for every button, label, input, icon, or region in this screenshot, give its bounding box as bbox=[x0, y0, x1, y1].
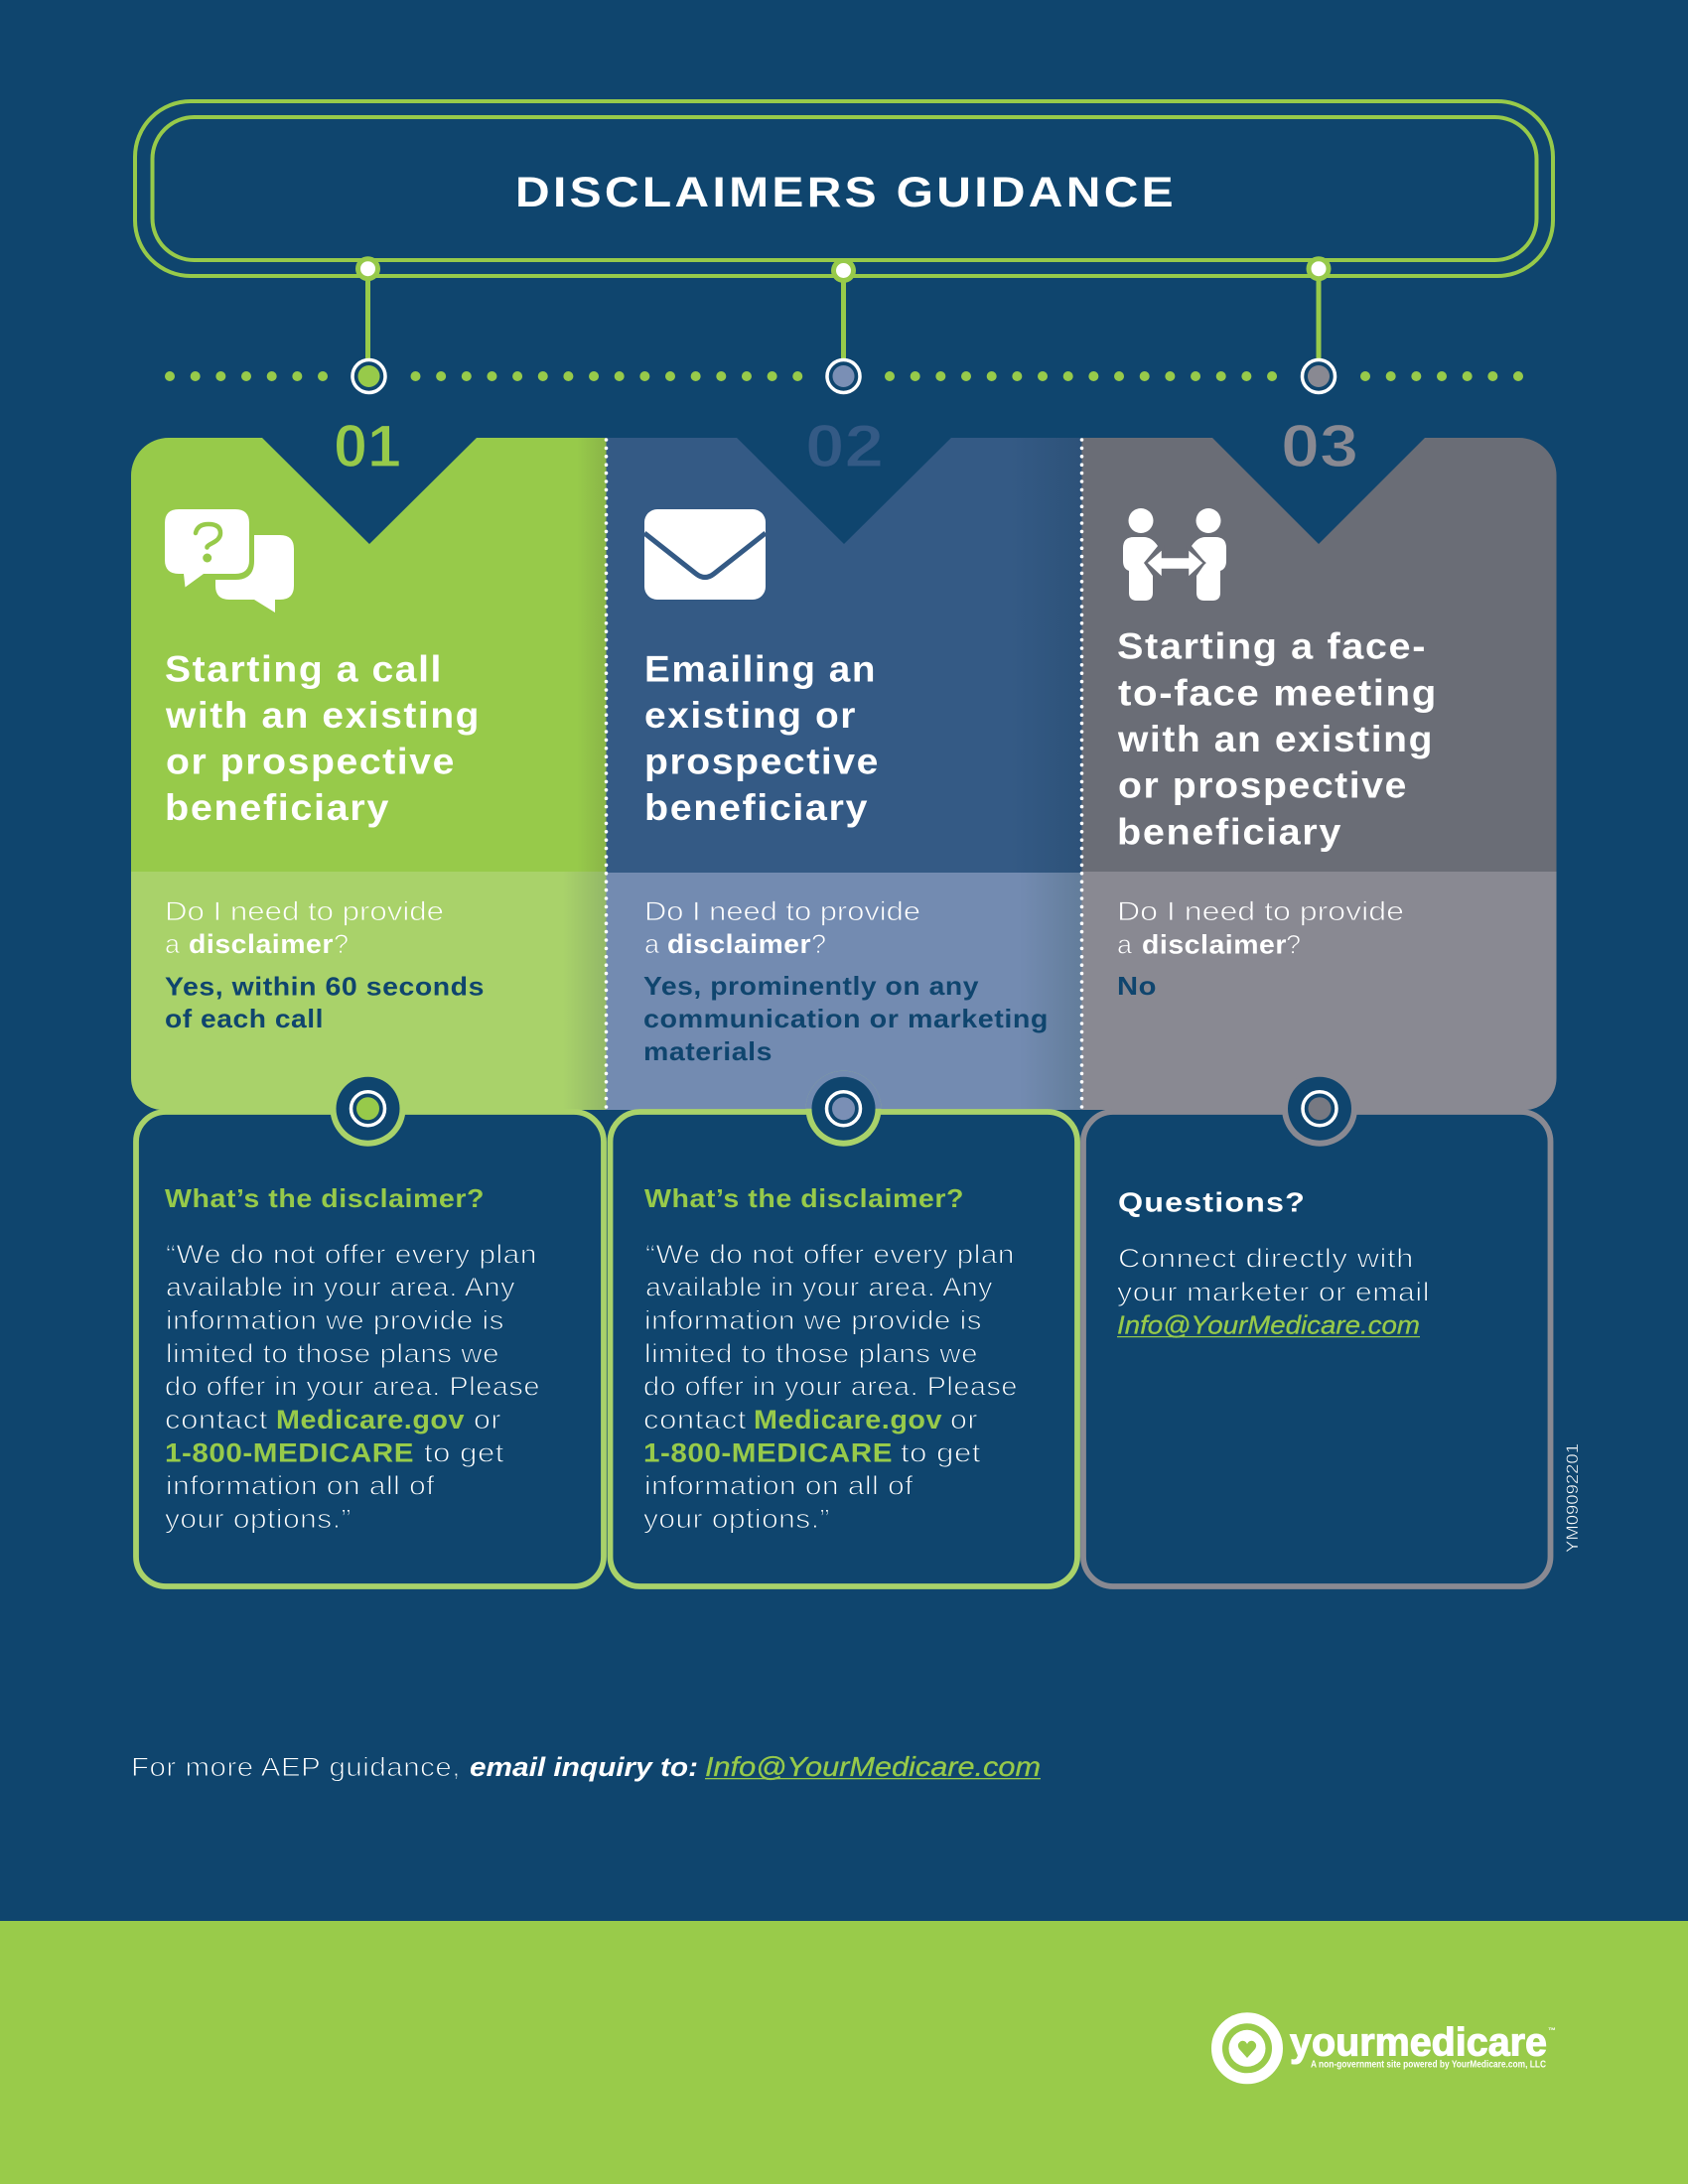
disclaimer text: column 2: your options.” bbox=[643, 1504, 830, 1534]
panel: column 2 email bbox=[606, 438, 1082, 1110]
disclaimer text: column 1: or bbox=[474, 1405, 501, 1434]
footer guidance line: Info@YourMedicare.com bbox=[705, 1751, 1041, 1782]
logo: yourmedicare: yourmedicare bbox=[1290, 2021, 1547, 2065]
heading: column 3: beneficiary bbox=[1117, 812, 1342, 852]
answer: column 3: No bbox=[1117, 971, 1157, 1001]
disclaimer text: column 1: to get bbox=[424, 1438, 504, 1468]
disclaimer text: column 1: information on all of bbox=[166, 1471, 435, 1501]
question: column 3: Do I need to provide bbox=[1117, 896, 1404, 926]
contact text bbox=[1117, 1243, 1430, 1340]
disclaimer text: column 2: or bbox=[950, 1405, 978, 1434]
contact text: Connect directly with bbox=[1118, 1243, 1414, 1273]
title frame with heading bbox=[135, 101, 1553, 276]
heading: column 1: beneficiary bbox=[165, 787, 390, 828]
disclaimer text: column 1: 1-800-MEDICARE bbox=[165, 1438, 414, 1468]
disclaimer text: column 2: available in your area. Any bbox=[645, 1273, 993, 1302]
card heading: questions: Questions? bbox=[1118, 1187, 1306, 1217]
logo: yourmedicare bbox=[1217, 2018, 1556, 2079]
answer: column 2: Yes, prominently on any bbox=[643, 971, 979, 1001]
disclaimer text: column 1: Medicare.gov bbox=[276, 1405, 465, 1434]
logo: yourmedicare: ™ bbox=[1548, 2026, 1556, 2035]
question: column 1: ? bbox=[334, 929, 349, 959]
disclaimer text: column 1: “We do not offer every plan bbox=[166, 1240, 537, 1270]
disclaimer text: column 2: Medicare.gov bbox=[754, 1405, 942, 1434]
question: column 2: disclaimer bbox=[667, 929, 811, 959]
question: column 1: disclaimer bbox=[189, 929, 334, 959]
answer: column 2: materials bbox=[643, 1036, 773, 1066]
question: column 2: a bbox=[644, 929, 660, 959]
heading: column 3: with an existing bbox=[1117, 719, 1434, 759]
panel: column 3 face-to-face bbox=[1082, 438, 1557, 1110]
logo: yourmedicare: A non-government site powered by YourMedicare.com, LLC bbox=[1311, 2060, 1546, 2071]
disclaimer text: column 2: limited to those plans we bbox=[644, 1339, 978, 1369]
heading: column 3: or prospective bbox=[1118, 764, 1408, 806]
footer band bbox=[0, 1921, 1688, 2184]
disclaimer text: column 2: contact bbox=[643, 1405, 747, 1434]
disclaimer text: column 2: “We do not offer every plan bbox=[645, 1240, 1015, 1270]
heading: column 3: Starting a face- bbox=[1117, 625, 1427, 667]
disclaimer text: column 1: do offer in your area. Please bbox=[165, 1372, 540, 1402]
contact text: your marketer or email bbox=[1117, 1278, 1430, 1307]
card heading: column 1: What’s the disclaimer? bbox=[165, 1183, 485, 1213]
disclaimer text: column 1: contact bbox=[165, 1405, 268, 1434]
card: disclaimer column 2 bbox=[610, 1071, 1077, 1586]
disclaimer text: column 1: available in your area. Any bbox=[166, 1273, 515, 1302]
heading: column 2: existing or bbox=[644, 695, 857, 736]
connector 3 bbox=[1303, 256, 1335, 393]
question: column 2: ? bbox=[811, 929, 826, 959]
answer: column 1: of each call bbox=[165, 1004, 324, 1033]
answer: column 2: communication or marketing bbox=[643, 1004, 1049, 1033]
answer: column 1: Yes, within 60 seconds bbox=[165, 971, 485, 1001]
disclaimer text: column 2: information on all of bbox=[644, 1471, 914, 1501]
disclaimer text: column 1: information we provide is bbox=[166, 1305, 504, 1335]
disclaimer text: column 1 bbox=[165, 1240, 540, 1534]
heading: column 2 bbox=[644, 649, 880, 828]
marker: column 1 bbox=[330, 1071, 405, 1147]
question: column 3: a bbox=[1117, 929, 1133, 959]
icon: two people with double arrow bbox=[1123, 508, 1226, 601]
number 01: 01 bbox=[334, 413, 401, 479]
question: column 2: Do I need to provide bbox=[644, 896, 920, 926]
heading: column 3 bbox=[1117, 625, 1438, 852]
panel: column 1 call bbox=[131, 438, 606, 1110]
footer guidance line: For more AEP guidance, bbox=[131, 1752, 461, 1782]
question: column 3: disclaimer bbox=[1142, 929, 1287, 959]
card: disclaimer column 1 bbox=[136, 1071, 604, 1586]
disclaimer text: column 1: your options.” bbox=[165, 1504, 352, 1534]
contact text: Info@YourMedicare.com bbox=[1117, 1310, 1420, 1340]
question: column 1 bbox=[165, 896, 444, 959]
answer: column 2 bbox=[643, 971, 1049, 1066]
heading: column 1 bbox=[165, 649, 481, 828]
heading: column 3: to-face meeting bbox=[1118, 673, 1438, 713]
card heading: column 2: What’s the disclaimer? bbox=[644, 1183, 964, 1213]
disclaimer text: column 2: to get bbox=[901, 1438, 981, 1468]
answer: column 1 bbox=[165, 971, 485, 1033]
heading: column 2: beneficiary bbox=[644, 787, 869, 828]
footer guidance line: email inquiry to: bbox=[470, 1752, 698, 1782]
title: DISCLAIMERS GUIDANCE bbox=[515, 169, 1177, 216]
connector 1 bbox=[352, 256, 385, 393]
disclaimer text: column 2 bbox=[643, 1240, 1018, 1534]
heading: column 1: with an existing bbox=[165, 695, 481, 736]
disclaimer text: column 2: information we provide is bbox=[644, 1305, 982, 1335]
footer guidance line bbox=[131, 1751, 1041, 1782]
disclaimer text: column 2: 1-800-MEDICARE bbox=[643, 1438, 893, 1468]
marker: column 2 bbox=[806, 1071, 882, 1147]
icon: envelope bbox=[644, 509, 766, 600]
document code: YM09092201 bbox=[1563, 1443, 1582, 1553]
number 02: 02 bbox=[805, 413, 884, 479]
marker: column 3 bbox=[1282, 1071, 1357, 1147]
connector 2 bbox=[827, 258, 860, 393]
question: column 1: a bbox=[165, 929, 181, 959]
heading: column 1: or prospective bbox=[166, 741, 456, 782]
question: column 2 bbox=[644, 896, 920, 959]
number 03: 03 bbox=[1281, 413, 1358, 479]
heading: column 1: Starting a call bbox=[165, 649, 443, 689]
question: column 3: ? bbox=[1286, 929, 1301, 959]
disclaimer text: column 1: limited to those plans we bbox=[166, 1339, 499, 1369]
heading: column 2: prospective bbox=[644, 741, 880, 782]
question: column 1: Do I need to provide bbox=[165, 896, 444, 926]
heading: column 2: Emailing an bbox=[644, 649, 877, 689]
question: column 3 bbox=[1117, 896, 1404, 959]
card: questions column 3 bbox=[1083, 1071, 1551, 1586]
icon: speech bubbles with question mark bbox=[165, 509, 294, 613]
disclaimer text: column 2: do offer in your area. Please bbox=[643, 1372, 1018, 1402]
